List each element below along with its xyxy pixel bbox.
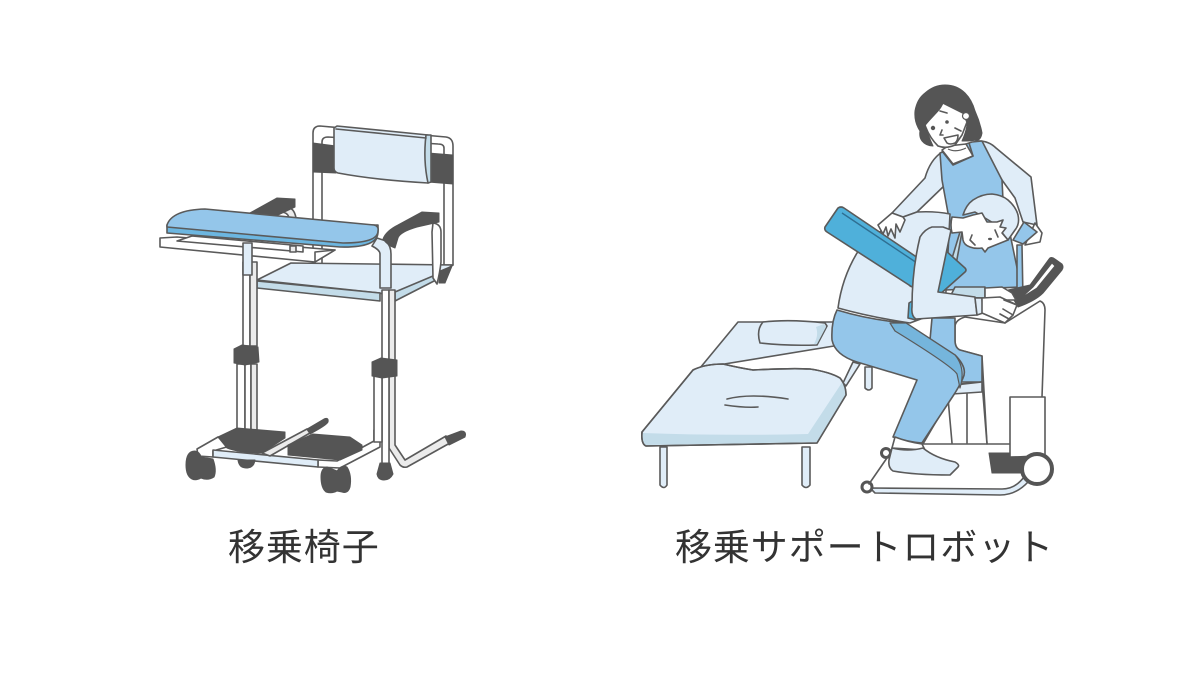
- chair seat: [257, 263, 453, 301]
- neck: [942, 144, 973, 164]
- shoe: [889, 448, 959, 475]
- lower cushion strap: [908, 300, 916, 320]
- trousers fold: [890, 323, 962, 388]
- sock: [892, 437, 925, 450]
- small wheels: [862, 482, 872, 492]
- caregiver left sleeve: [892, 152, 945, 217]
- caregiver: [892, 85, 1042, 300]
- torso: [838, 212, 950, 323]
- chair back cushion: [334, 126, 431, 183]
- base plate: [870, 477, 1028, 495]
- base frame with footrests: [186, 418, 380, 493]
- patient far hand: [985, 287, 1016, 300]
- rear small caster: [238, 460, 255, 468]
- large wheel: [1022, 454, 1052, 484]
- left armrest: [248, 198, 296, 218]
- robot body: [862, 301, 1052, 495]
- right armrest and support: [372, 212, 452, 288]
- pillow: [759, 321, 827, 345]
- cuff: [975, 298, 983, 315]
- face: [925, 103, 967, 147]
- chair back frame: [313, 126, 453, 265]
- hair: [915, 85, 982, 146]
- robot post: [1017, 245, 1023, 300]
- label: transfer support robot: 移乗サポートロボット: [675, 527, 1054, 568]
- bed: [642, 321, 872, 488]
- patient hand: [982, 297, 1017, 323]
- left leg: [234, 262, 259, 430]
- ear: [962, 112, 970, 120]
- patient: [825, 194, 1063, 475]
- handle: [1008, 258, 1063, 307]
- left wheel: [186, 451, 215, 480]
- front wheel: [321, 466, 351, 493]
- slide tray: [160, 236, 335, 275]
- cushion front piece: [935, 250, 966, 296]
- label: transfer chair: 移乗椅子: [228, 527, 380, 568]
- patient far sleeve: [950, 287, 985, 298]
- patient hair: [963, 194, 1019, 240]
- chest cushion: [825, 207, 918, 287]
- collar: [942, 143, 973, 165]
- trousers: [832, 310, 964, 443]
- apron: [940, 141, 1021, 290]
- patient arm: [912, 227, 977, 319]
- caregiver hand holding remote: [1025, 223, 1042, 245]
- remote in hand: [1013, 222, 1037, 244]
- tray cushion: [167, 209, 378, 247]
- face details: [931, 126, 935, 130]
- illustration: transfer chair: [160, 126, 466, 493]
- patient head: [951, 213, 1008, 252]
- illustration: transfer support robot with caregiver and patient: [642, 85, 1063, 495]
- right leg with outrigger: [372, 290, 466, 480]
- caregiver hand on patient back: [878, 213, 905, 238]
- mattress: [642, 364, 846, 446]
- caregiver right sleeve: [976, 141, 1037, 225]
